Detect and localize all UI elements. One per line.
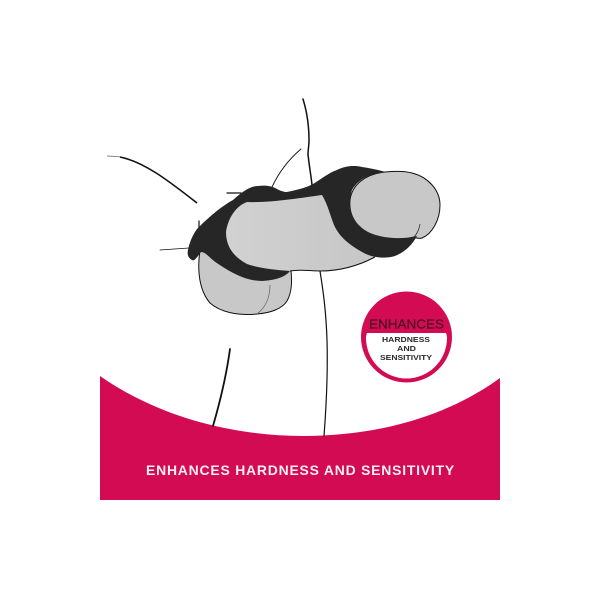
illustration: glans [350,171,440,240]
badge ring [361,292,452,382]
illustration: body outline strokes [107,99,327,436]
banner caption: ENHANCES HARDNESS AND SENSITIVITY [146,462,455,478]
badge line 3: SENSITIVITY [380,353,432,362]
illustration: testicles [199,250,292,315]
shaft lower outline [290,257,375,271]
glans crease [414,224,420,237]
illustration: black ring around shaft and head [188,166,417,281]
badge line 2: AND [397,344,417,353]
badge heading: ENHANCES [369,318,444,332]
badge: enhances hardness and sensitivity [361,292,452,382]
panel: crimson curved banner [100,376,500,500]
testicle crease [257,285,270,314]
illustration: shaft [220,188,375,271]
badge white lower section [366,333,447,378]
badge line 1: HARDNESS [382,335,430,344]
